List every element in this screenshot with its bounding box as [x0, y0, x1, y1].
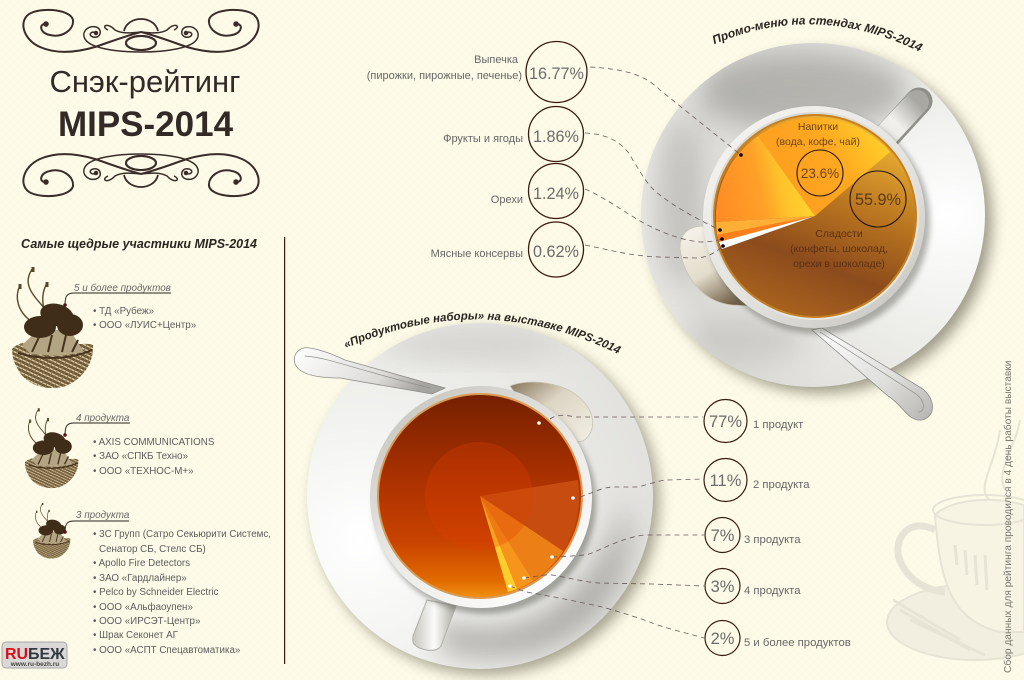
list: 3 products: • ООО «Альфаоупен» [93, 602, 193, 613]
title: product sets: «Продуктовые наборы» на выставке MIPS-2014 [345, 312, 622, 354]
leader: 4 products [63, 423, 130, 437]
callout: 0.62% meat: Мясные консервы [431, 248, 523, 260]
callout: 0.62% meat: 0.62% [533, 243, 579, 261]
list: 4 products [93, 437, 215, 477]
list: 5 and more: • ООО «ЛУИС+Центр» [93, 320, 197, 331]
leader: 5 and more [63, 293, 171, 307]
circle: 23.6% [797, 150, 843, 196]
slice: sweets 55.9% [713, 114, 917, 318]
slice: 4 products 3% [480, 496, 533, 589]
slice: meat 0.62% [719, 216, 815, 249]
title: MIPS-2014 [58, 105, 234, 144]
callout: 16.77% pastry: (пирожки, пирожные, печенье) [367, 70, 522, 82]
callout: 0.62% meat [431, 222, 725, 277]
heading: generous participants: Самые щедрые участники MIPS-2014 [21, 237, 257, 251]
list: 3 products: Сенатор СБ, Стелс СБ) [99, 544, 206, 555]
slice: 2 products 11% [480, 480, 579, 551]
label: sweets [790, 228, 888, 270]
callout: 1.24% nuts: Орехи [491, 194, 523, 206]
callout: 16.77% pastry [367, 42, 743, 157]
cup: top [703, 106, 930, 334]
label: drinks [776, 121, 860, 148]
spoon bowl: bottom saucer [510, 382, 593, 445]
list: 5 and more: • ТД «Рубеж» [93, 306, 155, 317]
callout: 77%: 77% [709, 413, 742, 431]
callout: 3%: 3% [711, 578, 735, 596]
logo: RUBEZH: RU [5, 646, 28, 663]
list: 3 products [93, 529, 271, 656]
callout: 11%: 11% [710, 472, 742, 490]
slice: 3 products 7% [480, 496, 563, 581]
footnote: vertical: Сбор данных для рейтинга проводился в 4 день работы выставки [1002, 361, 1014, 673]
list: 3 products: • ООО «АСПТ Спецавтоматика» [93, 645, 241, 656]
list: 3 products: • Pelco by Schneider Electric [93, 587, 219, 598]
inner circle glow [425, 442, 533, 550]
title: promo menu: Промо-меню на стендах MIPS-2014 [712, 18, 923, 52]
callout: 77%: 1 продукт [753, 419, 803, 431]
icon: basket large [12, 267, 93, 388]
logo: RUBEZH [2, 642, 67, 668]
label: 4 products: 4 продукта [76, 413, 130, 424]
icon: basket medium [25, 408, 78, 488]
slice: pastry 16.77% [716, 136, 815, 222]
logo: RUBEZH: www.ru-bezh.ru [10, 661, 59, 668]
callout: 77% [537, 400, 803, 442]
spoon: bottom cup, handle and tip [294, 348, 445, 394]
callout: 11%: 2 продукта [753, 479, 810, 491]
list: 3 products: • ООО «ИРСЭТ-Центр» [93, 616, 201, 627]
list: 3 products: • 3С Групп (Сатро Секьюрити Системс, [93, 529, 271, 540]
title: Снэк-рейтинг [50, 64, 240, 99]
callout: 2% [508, 584, 851, 656]
callout: 1.86% fruit: 1.86% [533, 128, 579, 146]
group: 3 products [33, 503, 271, 656]
handle: top cup [877, 101, 919, 146]
spoon: top cup, handle and tip [812, 328, 933, 420]
callout: 1.86% fruit: Фрукты и ягоды [443, 133, 523, 145]
label: drinks: (вода, кофе, чай) [776, 136, 860, 148]
saucer: bottom [307, 323, 659, 675]
label: 3 products: 3 продукта [76, 510, 130, 521]
callout: 7%: 3 продукта [744, 534, 801, 546]
title [50, 64, 240, 144]
slice: fruit 1.86% [716, 216, 815, 235]
list: 4 products: • ЗАО «СПКБ Техно» [93, 451, 189, 462]
callout: 3% [522, 568, 801, 604]
ornament: bottom [23, 154, 259, 196]
slice: drinks 23.6% [758, 118, 890, 216]
callout: 3%: 4 продукта [744, 585, 801, 597]
callout: 1.86% fruit [443, 106, 722, 232]
list: 3 products: • ЗАО «Гардлайнер» [93, 573, 187, 584]
slice: 5+ products 2% [480, 496, 517, 592]
group: 4 products [25, 408, 215, 488]
label: sweets: Сладости [815, 228, 863, 240]
saucer: top [641, 43, 992, 393]
label: 5 and more: 5 и более продуктов [74, 283, 171, 294]
slice: 1 product 77% [379, 395, 581, 597]
icon: basket small [33, 503, 70, 559]
vertical divider [284, 237, 285, 664]
pie chart: promo menu [713, 114, 917, 318]
label: drinks: Напитки [798, 121, 838, 133]
slice: nuts 1.24% [717, 216, 815, 242]
ornament: top [23, 10, 259, 52]
callout: 11% [571, 458, 810, 502]
callout: 2%: 5 и более продуктов [744, 637, 851, 649]
cup: bottom [370, 386, 596, 614]
label: sweets: орехи в шоколаде) [793, 258, 885, 270]
list: 4 products: • ООО «ТЕХНОС-М+» [93, 466, 194, 477]
leader: 3 products [63, 521, 129, 534]
logo: RUBEZH: БЕЖ [28, 646, 65, 663]
circle: 55.9%: 55.9% [855, 191, 901, 209]
circle: 55.9% [850, 171, 906, 227]
callout: 16.77% pastry: Выпечка [474, 54, 519, 66]
list: 5 and more [93, 306, 197, 331]
spoon bowl: top saucer [680, 226, 750, 306]
callout: 1.24% nuts [491, 164, 724, 242]
callout: 7%: 7% [711, 527, 735, 545]
callout: 16.77% pastry: 16.77% [529, 65, 584, 83]
callout: 2%: 2% [711, 630, 735, 648]
group: 5 and more products [12, 267, 197, 388]
handle: bottom cup [413, 600, 456, 650]
callout: 1.24% nuts: 1.24% [533, 185, 579, 203]
list: 4 products: • AXIS COMMUNICATIONS [93, 437, 215, 448]
list: 3 products: • Шрак Секонет АГ [93, 630, 179, 641]
pie chart: product sets [379, 395, 581, 597]
callout: 7% [550, 518, 801, 559]
watermark: cup sketch [887, 420, 1024, 660]
circle: 23.6%: 23.6% [801, 166, 839, 181]
list: 3 products: • Apollo Fire Detectors [93, 558, 190, 569]
label: sweets: (конфеты, шоколад, [790, 243, 888, 255]
